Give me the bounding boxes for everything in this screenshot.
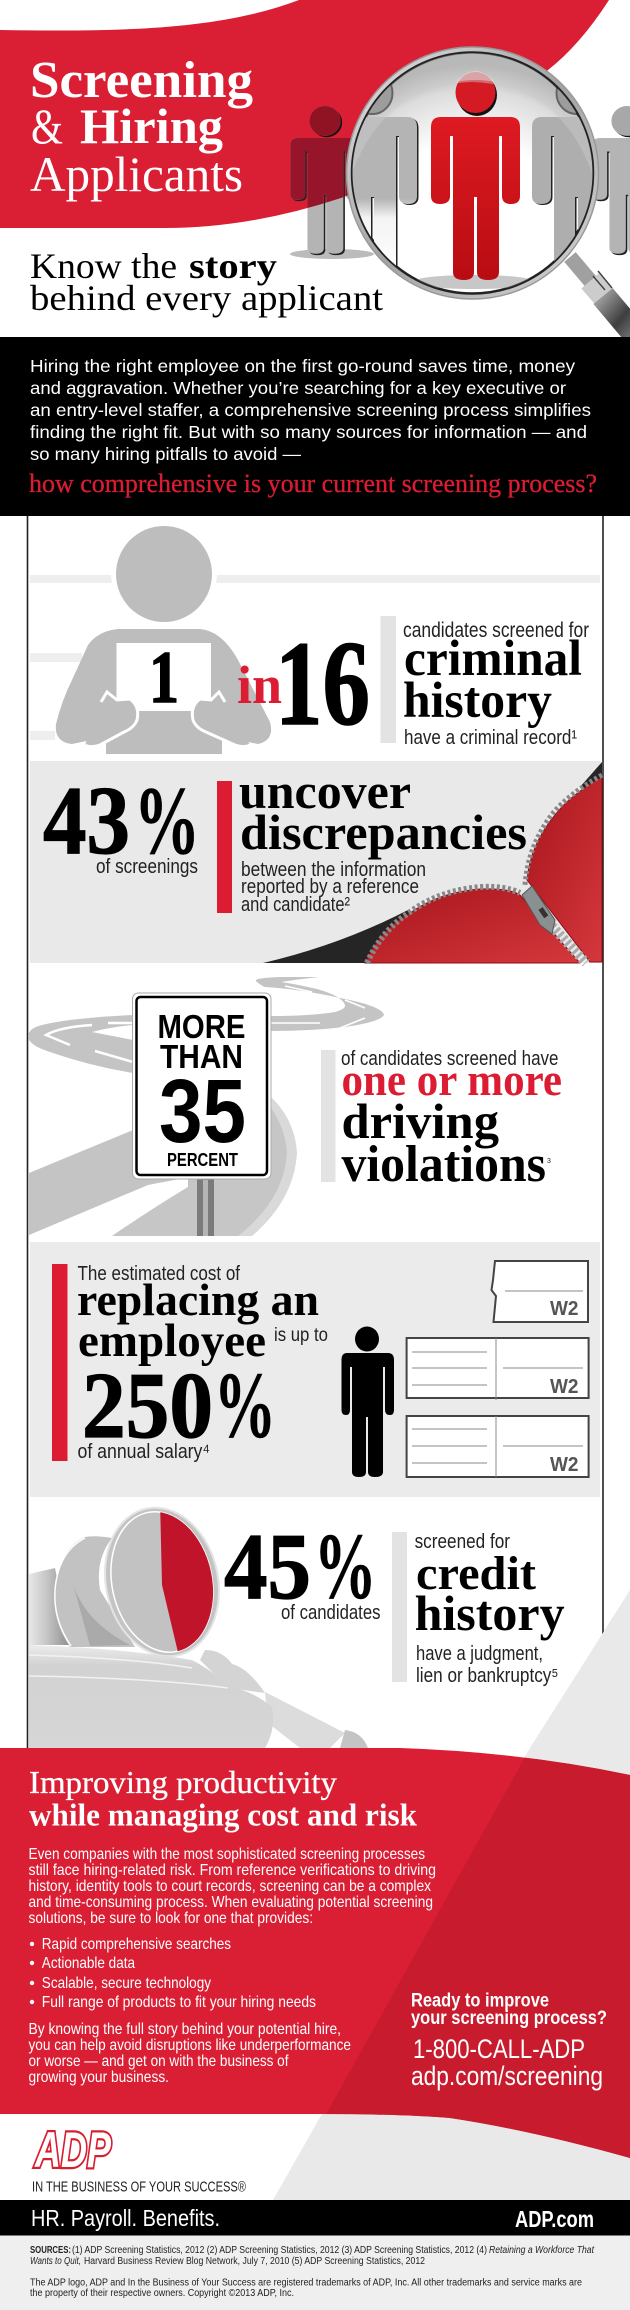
icon: road sign: MORE <box>158 1008 246 1045</box>
driving text: of candidates screened have <box>341 1048 558 1070</box>
W2 form 3: W2 <box>550 1454 578 1476</box>
divider bar <box>380 616 396 743</box>
driving text: one or more <box>342 1055 562 1105</box>
heading <box>29 1764 417 1832</box>
16: 16 <box>275 617 370 751</box>
bullet list: Rapid comprehensive searches <box>42 1936 231 1953</box>
W2 form 1 <box>492 1261 588 1322</box>
trademark text <box>30 2278 582 2299</box>
icon: road sign: 35 <box>159 1062 246 1162</box>
red bar <box>52 1264 68 1461</box>
bullet list: Scalable, secure technology <box>42 1975 211 1992</box>
title <box>30 52 253 202</box>
sources text: Retaining a Workforce That <box>489 2245 595 2256</box>
cost text: replacing an <box>77 1274 319 1325</box>
shadow under figures <box>290 249 374 259</box>
number 1: 1 <box>149 637 179 719</box>
tagline: IN THE BUSINESS OF YOUR SUCCESS® <box>32 2180 246 2196</box>
panel: replacement cost <box>30 1242 600 1497</box>
icon: road sign: THAN <box>160 1038 243 1075</box>
closing paragraph: By knowing the full story behind your potential hire, <box>28 2021 341 2038</box>
43%: 43 <box>43 767 130 875</box>
body paragraph: still face hiring-related risk. From reference verifications to driving <box>28 1862 436 1879</box>
cost text: employee <box>78 1315 266 1367</box>
icon: road sign: PERCENT <box>167 1150 238 1170</box>
criminal text: history <box>403 673 552 729</box>
heading: while managing cost and risk <box>29 1796 417 1832</box>
criminal text: candidates screened for <box>403 619 589 642</box>
sources text: Wants to Quit, <box>30 2256 81 2267</box>
closing paragraph: you can help avoid disruptions like underperformance <box>28 2037 351 2054</box>
bullet list: Actionable data <box>42 1955 135 1972</box>
closing paragraph <box>28 2021 351 2086</box>
cost text: % <box>214 1354 276 1458</box>
gray band <box>30 761 601 963</box>
45%: 45 <box>224 1515 311 1619</box>
call to action: 1-800-CALL-ADP <box>413 2034 585 2064</box>
cost text: The estimated cost of <box>78 1263 240 1285</box>
bullet list: Full range of products to fit your hiring needs <box>42 1994 316 2011</box>
criminal text: criminal <box>404 631 582 687</box>
red bar <box>217 781 232 913</box>
illustration: gavel <box>29 1497 368 1748</box>
subtitle <box>30 246 383 318</box>
of screenings: of screenings <box>96 856 198 878</box>
panel: introduction <box>0 337 630 516</box>
icon: right figure <box>592 106 630 255</box>
discrepancy text: and candidate² <box>241 894 350 916</box>
divider bar <box>392 1532 407 1682</box>
icon: road sign <box>132 993 271 1236</box>
intro paragraph <box>30 356 591 464</box>
red swoosh <box>0 0 609 228</box>
red swoosh <box>0 1748 630 2158</box>
frame lines <box>28 516 603 1748</box>
body paragraph <box>28 1846 436 1927</box>
title: & <box>31 98 63 154</box>
title: Applicants <box>30 146 243 202</box>
body paragraph: and time-consuming process. When evaluating potential screening <box>28 1894 433 1911</box>
criminal text: have a criminal record¹ <box>404 727 577 749</box>
cost text: is up to <box>274 1325 328 1346</box>
illustration: winding road <box>28 977 384 1236</box>
driving text: violations <box>342 1136 546 1193</box>
trademark text: the property of their respective owners. Copyright ©2013 ADP, Inc. <box>30 2288 294 2299</box>
sources text: Harvard Business Review Blog Network, July 7, 2010 (5) ADP Screening Statistics, 2012 <box>84 2256 425 2267</box>
body paragraph: history, identity tools to court records, screening can be a complex <box>28 1878 431 1895</box>
panel: criminal history <box>30 520 600 754</box>
credit text: screened for <box>415 1531 510 1553</box>
intro paragraph: Hiring the right employee on the first go-round saves time, money <box>30 356 575 376</box>
icon: person holding card <box>56 520 271 754</box>
panel: header <box>0 0 630 340</box>
criminal text <box>403 619 589 749</box>
closing paragraph: or worse — and get on with the business of <box>28 2053 289 2070</box>
45% <box>224 1515 376 1619</box>
divider bar <box>321 1050 336 1182</box>
discrepancy text: between the information <box>241 859 426 881</box>
ADP logo: ADP <box>34 2122 111 2178</box>
45%: % <box>314 1515 376 1619</box>
cost text <box>77 1263 328 1463</box>
subtitle: behind every applicant <box>30 278 383 318</box>
driving text: driving <box>342 1093 499 1149</box>
discrepancy text: reported by a reference <box>241 876 419 898</box>
cost text: of annual salary⁴ <box>78 1441 210 1463</box>
call to action <box>411 1990 607 2091</box>
W2 form 2: W2 <box>550 1376 578 1398</box>
credit text <box>415 1531 565 1687</box>
discrepancy text: discrepancies <box>240 804 527 860</box>
gray band <box>30 1242 600 1497</box>
panel: credit history <box>29 1497 565 1748</box>
icon: magnifying glass <box>328 47 630 340</box>
closing paragraph: growing your business. <box>28 2069 169 2086</box>
subtitle: Know the <box>30 246 177 286</box>
subtitle: story <box>189 246 277 286</box>
43% <box>43 767 200 875</box>
W2 form 3 <box>407 1416 589 1477</box>
gray diagonal background <box>273 1590 630 2200</box>
W2 form 1: W2 <box>550 1298 578 1320</box>
43%: % <box>134 767 200 875</box>
icon: left figure <box>290 106 351 256</box>
background stripes <box>30 575 600 740</box>
driving text <box>341 1048 562 1193</box>
illustration: zipper <box>263 762 602 963</box>
trademark text: The ADP logo, ADP and In the Business of Your Success are registered trademarks of ADP, Inc. All other trademarks and service marks are <box>30 2278 582 2288</box>
black band <box>0 337 630 516</box>
sources text: (1) ADP Screening Statistics, 2012 (2) ADP Screening Statistics, 2012 (3) ADP Screening Statistics, 2012 (4) <box>72 2245 487 2256</box>
tagline text: HR. Payroll. Benefits. <box>31 2205 220 2231</box>
heading: Improving productivity <box>29 1764 337 1800</box>
intro paragraph: an entry-level staffer, a comprehensive screening process simplifies <box>30 400 591 420</box>
cost text: 250 <box>82 1354 213 1458</box>
credit text: have a judgment, <box>416 1643 543 1665</box>
title: Screening <box>30 52 253 109</box>
intro paragraph: so many hiring pitfalls to avoid — <box>30 444 302 464</box>
credit text: history <box>415 1585 565 1641</box>
panel: sources <box>0 2236 630 2310</box>
dark diagonal <box>326 1758 630 2158</box>
panel: logo <box>32 2122 246 2196</box>
panel: driving violations <box>28 977 562 1236</box>
website: ADP.com <box>515 2206 594 2232</box>
intro paragraph: and aggravation. Whether you’re searching for a key executive or <box>30 378 566 398</box>
credit text: credit <box>416 1547 536 1600</box>
icon: black person <box>342 1326 394 1477</box>
W2 form 2 <box>407 1338 589 1400</box>
discrepancy text <box>239 763 527 916</box>
of candidates: of candidates <box>281 1602 380 1624</box>
driving text: 3 <box>547 1158 551 1165</box>
discrepancy text: uncover <box>239 763 411 819</box>
panel: footer bar <box>0 2200 630 2236</box>
sources text <box>30 2245 595 2267</box>
panel: improving productivity <box>0 1748 630 2170</box>
title: Hiring <box>80 98 223 154</box>
sources text: SOURCES: <box>30 2245 71 2256</box>
intro paragraph: finding the right fit. But with so many sources for information — and <box>30 422 587 442</box>
bullet list <box>30 1936 316 2011</box>
in: in <box>237 655 282 715</box>
body paragraph: Even companies with the most sophisticated screening processes <box>28 1846 425 1863</box>
credit text: lien or bankruptcy⁵ <box>416 1665 558 1687</box>
body paragraph: solutions, be sure to look for one that provides: <box>28 1910 313 1927</box>
call to action: Ready to improve <box>411 1990 549 2012</box>
red question: how comprehensive is your current screening process? <box>29 469 597 498</box>
panel: discrepancies <box>30 761 602 963</box>
